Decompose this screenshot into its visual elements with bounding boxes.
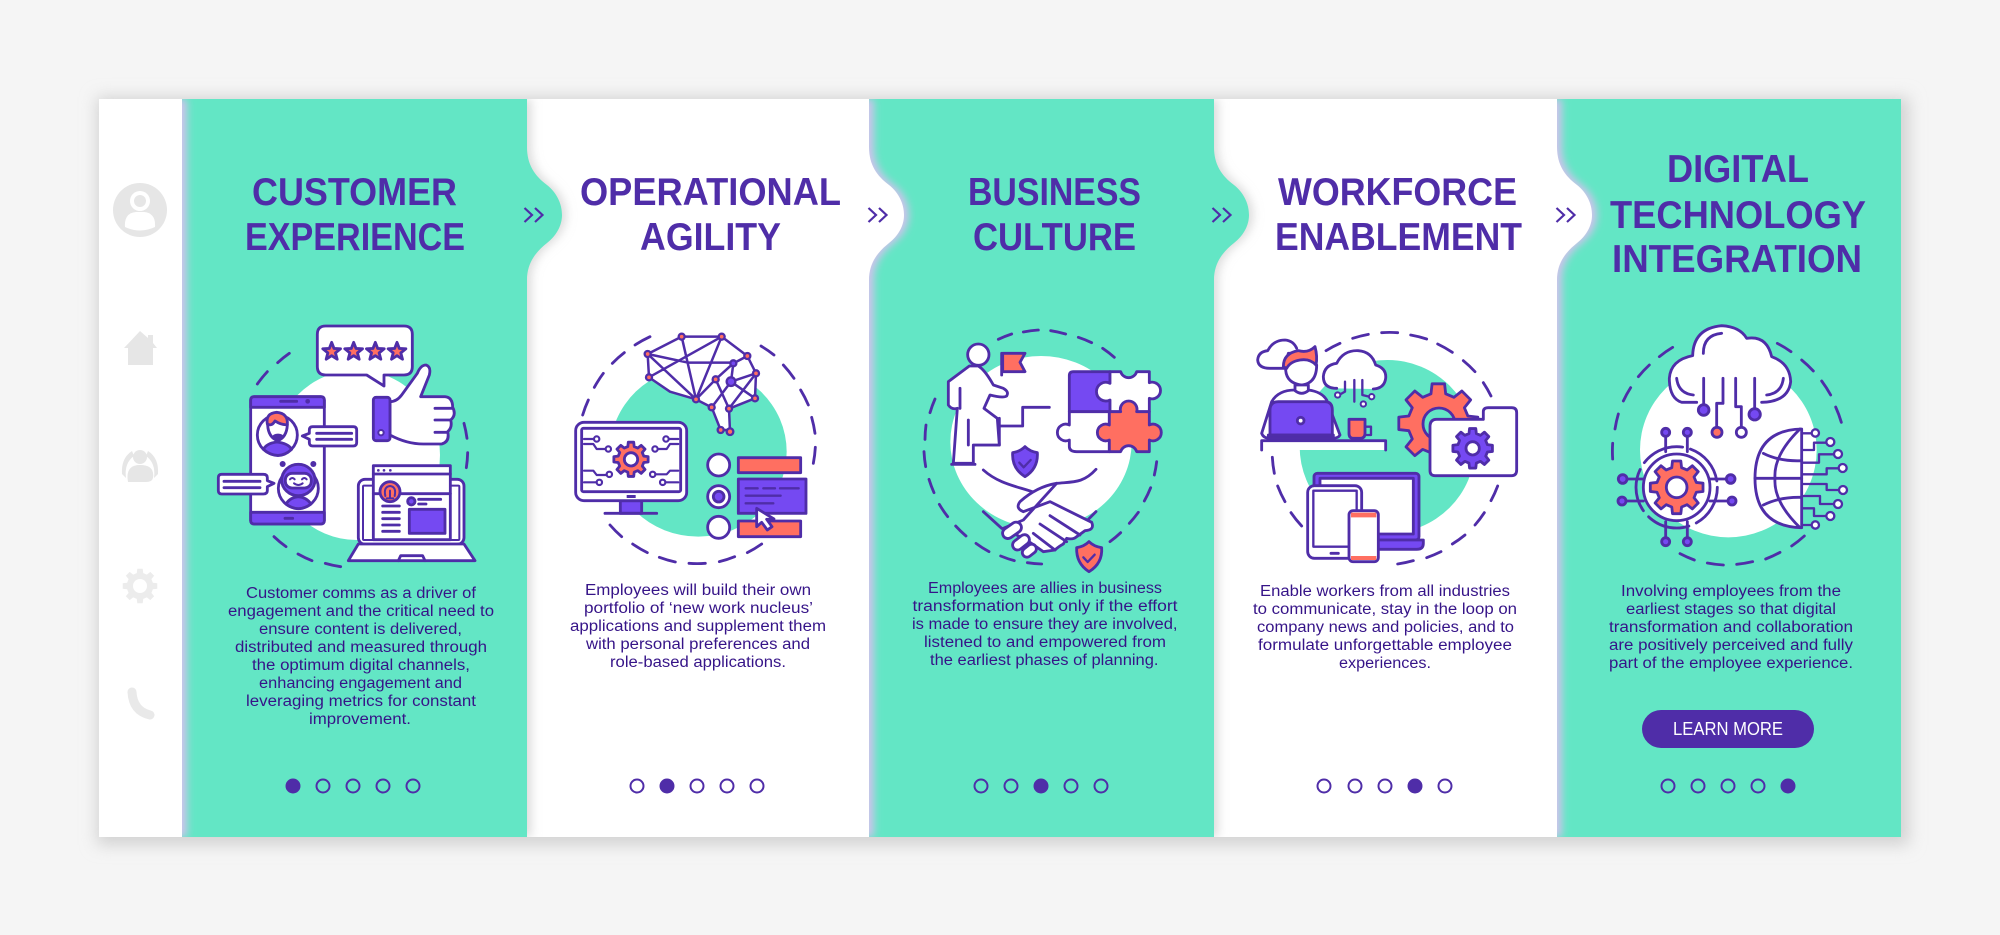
arrow <box>1556 208 1574 222</box>
body text: experiences. <box>1339 655 1431 672</box>
body text: Employees are allies in business <box>928 580 1162 597</box>
illustration: digital technology integration <box>1612 326 1847 565</box>
heading: WORKFORCE <box>1278 171 1517 214</box>
body text <box>1253 583 1517 672</box>
sidebar icons <box>113 183 167 715</box>
panel 4 background <box>1214 99 1602 837</box>
icon: puzzle <box>1057 372 1161 452</box>
heading: AGILITY <box>640 216 781 259</box>
body text: with personal preferences and <box>585 636 810 653</box>
body text: the earliest phases of planning. <box>930 652 1158 669</box>
sidebar background <box>99 99 182 837</box>
pagination dots <box>974 780 1108 792</box>
arrow <box>524 208 542 222</box>
icon: cloud with circuits <box>1669 326 1791 437</box>
panel 3 background <box>869 99 1256 837</box>
panel: customer experience <box>218 171 542 792</box>
icon: neural brain <box>645 334 759 435</box>
icon: phone <box>132 692 150 715</box>
body text: distributed and measured through <box>235 639 487 656</box>
arrow <box>868 208 886 222</box>
arrow <box>1212 208 1230 222</box>
body text: portfolio of ‘new work nucleus’ <box>584 600 813 617</box>
icon: coral shield <box>1077 542 1102 572</box>
heading: OPERATIONAL <box>580 171 841 214</box>
body text <box>1609 583 1853 672</box>
heading <box>245 171 465 259</box>
button: learn more <box>1642 710 1814 748</box>
body text <box>228 585 494 728</box>
illustration: operational agility <box>576 334 815 564</box>
heading <box>1610 148 1866 281</box>
panel 5 background <box>1557 99 1901 837</box>
panel 1 background <box>150 99 562 837</box>
heading <box>580 171 841 259</box>
body text: leveraging metrics for constant <box>246 693 477 710</box>
body text: ensure content is delivered, <box>259 621 462 638</box>
pagination dots <box>1318 780 1452 792</box>
icon: people <box>122 450 158 482</box>
heading: DIGITAL <box>1667 148 1809 191</box>
heading: CULTURE <box>973 216 1136 259</box>
body text: earliest stages so that digital <box>1626 601 1836 618</box>
panel: digital technology integration <box>1609 148 1866 792</box>
icon: cloud <box>1323 351 1386 407</box>
body text: Customer comms as a driver of <box>246 585 477 602</box>
icon: person at laptop <box>1258 340 1386 450</box>
icon: profile <box>113 183 167 237</box>
body text: the optimum digital channels, <box>252 657 470 674</box>
body text: transformation but only if the effort <box>912 598 1178 615</box>
icon: gear and folder <box>1399 384 1517 476</box>
heading: TECHNOLOGY <box>1610 194 1866 237</box>
panel: workforce enablement <box>1253 171 1574 792</box>
body text: is made to ensure they are involved, <box>912 616 1178 633</box>
body text <box>570 582 826 671</box>
body text: listened to and empowered from <box>924 634 1166 651</box>
panel backgrounds <box>99 99 1901 837</box>
body text: Enable workers from all industries <box>1260 583 1510 600</box>
heading <box>1275 171 1522 259</box>
body text: role-based applications. <box>610 654 786 671</box>
icon: devices <box>1308 473 1423 562</box>
icon: form options <box>708 454 806 538</box>
body text: improvement. <box>309 711 411 728</box>
body text: transformation and collaboration <box>1609 619 1853 636</box>
pagination dots <box>286 780 420 792</box>
icon: monitor with gear <box>576 422 687 513</box>
body text: engagement and the critical need to <box>228 603 494 620</box>
panel: business culture <box>912 171 1230 792</box>
icon: shield <box>1013 447 1037 477</box>
heading <box>968 171 1141 259</box>
body text <box>912 580 1178 669</box>
illustration: workforce enablement <box>1258 332 1517 564</box>
icon: settings gear <box>123 569 157 603</box>
body text: enhancing engagement and <box>259 675 462 692</box>
heading: ENABLEMENT <box>1275 216 1522 259</box>
body text: Involving employees from the <box>1621 583 1841 600</box>
frame shadow <box>97 97 1909 845</box>
body text: company news and policies, and to <box>1257 619 1514 636</box>
body text: to communicate, stay in the loop on <box>1253 601 1517 618</box>
heading: EXPERIENCE <box>245 216 465 259</box>
body text: part of the employee experience. <box>1609 655 1853 672</box>
heading: CUSTOMER <box>252 171 457 214</box>
icon: laptop with web page <box>348 466 475 561</box>
heading: BUSINESS <box>968 171 1141 214</box>
pagination dots <box>1662 780 1794 792</box>
icon: climbing person with flag <box>948 344 1049 464</box>
body text: applications and supplement them <box>570 618 826 635</box>
icon: globe with circuits <box>1755 429 1847 529</box>
button: learn more: LEARN MORE <box>1673 719 1783 739</box>
panel 2 background <box>527 99 914 837</box>
icon: handshake <box>983 469 1096 559</box>
body text: are positively perceived and fully <box>1609 637 1853 654</box>
icon: phone chat <box>218 397 357 524</box>
icon: thumbs up <box>373 365 454 444</box>
pagination dots <box>630 780 764 792</box>
body text: Employees will build their own <box>585 582 811 599</box>
body text: formulate unforgettable employee <box>1258 637 1512 654</box>
icon: rating bubble <box>317 326 412 386</box>
heading: INTEGRATION <box>1612 238 1862 281</box>
illustration: business culture <box>924 330 1161 572</box>
icon: gear chip <box>1618 428 1736 546</box>
illustration: customer experience <box>218 326 475 567</box>
icon: home <box>124 331 157 365</box>
panel: operational agility <box>570 171 886 792</box>
